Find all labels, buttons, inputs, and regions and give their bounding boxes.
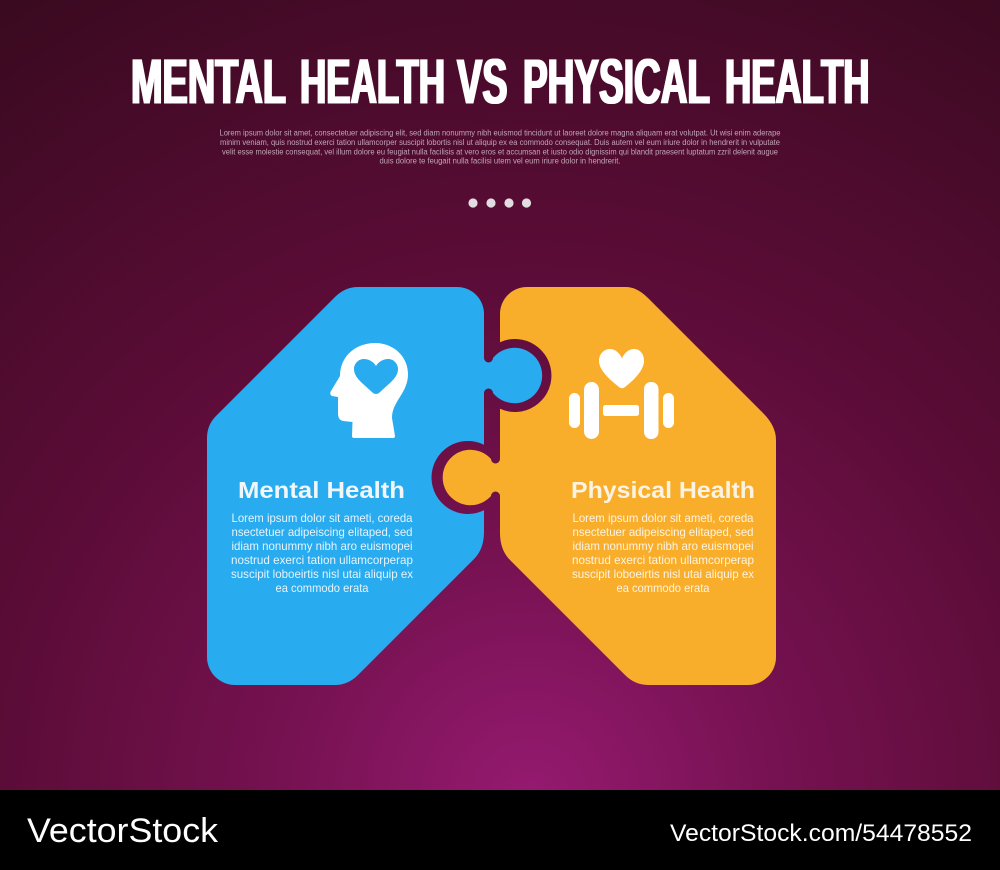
intro text block: Lorem ipsum dolor sit amet, consectetuer adipiscing elit, sed diam nonummy nibh euismod tincidunt ut laoreet dolore magna aliquam erat volutpat. Ut wisi enim aderape — [220, 128, 780, 138]
description: physical health: ea commodo erata — [616, 582, 710, 595]
footer bar — [0, 790, 1000, 870]
title — [131, 45, 870, 117]
description: physical health — [572, 512, 754, 595]
title: VS — [457, 45, 508, 117]
description: mental health: suscipit loboeirtis nisl utai aliquip ex — [231, 568, 413, 581]
pagination dots — [468, 198, 531, 208]
footer logo: VectorStock — [27, 812, 219, 850]
panel: physical health — [443, 287, 776, 685]
orange puzzle piece — [443, 287, 776, 685]
panel: mental health — [207, 287, 542, 685]
description: mental health: nostrud exerci tation ullamcorperap — [231, 554, 413, 567]
heading: physical health: Physical Health — [571, 477, 755, 503]
title: HEALTH — [300, 45, 445, 117]
blue puzzle piece — [207, 287, 542, 685]
description: mental health: nsectetuer adipeiscing elitaped, sed — [232, 526, 412, 539]
icon: heart and dumbbell — [569, 349, 674, 439]
icon: head with heart — [330, 343, 408, 438]
description: mental health: Lorem ipsum dolor sit ameti, coreda — [232, 512, 413, 525]
title: MENTAL — [131, 45, 286, 117]
heading: mental health: Mental Health — [238, 477, 405, 503]
description: physical health: idiam nonummy nibh aro euismopei — [572, 540, 754, 553]
description: physical health: nsectetuer adipeiscing elitaped, sed — [572, 526, 754, 539]
title: HEALTH — [725, 45, 870, 117]
description: mental health — [231, 512, 413, 595]
description: physical health: suscipit loboeirtis nisl utai aliquip ex — [572, 568, 754, 581]
description: physical health: Lorem ipsum dolor sit ameti, coreda — [572, 512, 754, 525]
description: mental health: idiam nonummy nibh aro euismopei — [232, 540, 412, 553]
title: PHYSICAL — [523, 45, 710, 117]
intro text block: duis dolore te feugait nulla facilisi utem vel eum iriure dolor in hendrerit. — [380, 156, 620, 166]
footer url: VectorStock.com/54478552 — [670, 820, 972, 847]
intro text block — [220, 128, 780, 166]
intro text block: minim veniam, quis nostrud exerci tation ullamcorper suscipit lobortis nisl ut aliquip ex ea commodo consequat. Duis autem vel eum iriure dolor in hendrerit in vulputate — [220, 138, 780, 147]
description: physical health: nostrud exerci tation ullamcorperap — [572, 554, 754, 567]
intro text block: velit esse molestie consequat, vel illum dolore eu feugiat nulla facilisis at vero eros et accumsan et iusto odio dignissim qui blandit praesent luptatum zzril delenit augue — [222, 148, 778, 156]
description: mental health: ea commodo erata — [276, 582, 369, 595]
